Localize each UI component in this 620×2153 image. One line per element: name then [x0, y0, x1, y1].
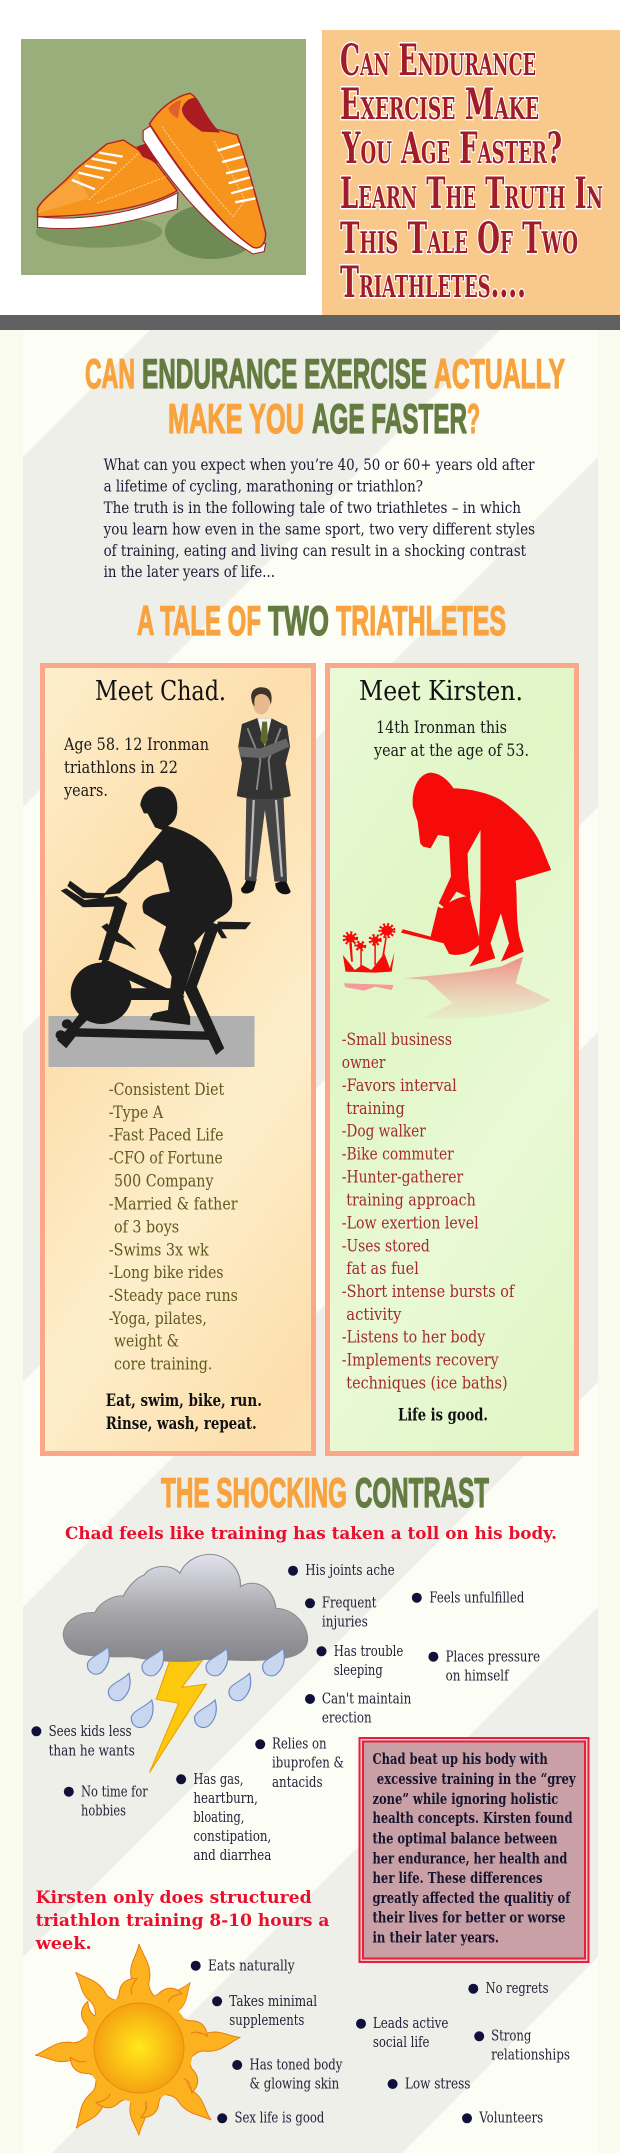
callout: summary box: her life. These differences — [372, 1870, 542, 1887]
Chad symptoms bullets: and diarrhea — [193, 1847, 272, 1864]
Kirsten motto: Life is good. — [398, 1406, 488, 1425]
Chad traits list: -CFO of Fortune — [109, 1149, 223, 1169]
Chad symptoms bullets: ibuprofen & — [272, 1755, 344, 1772]
Kirsten traits list: training — [346, 1099, 405, 1119]
Chad symptoms bullets: Frequent — [322, 1595, 377, 1612]
callout: summary box: her endurance, her health and — [372, 1851, 567, 1868]
heading: a tale of two triathletes: A TALE OF — [137, 597, 261, 644]
Chad traits list: -Married & father — [109, 1194, 238, 1214]
Kirsten traits list: owner — [342, 1053, 386, 1073]
Chad traits list: -Type A — [109, 1103, 164, 1123]
Chad traits list — [109, 1080, 238, 1375]
Chad symptoms bullets: His joints ache — [305, 1562, 395, 1579]
Kirsten benefits bullets: social life — [373, 2034, 429, 2051]
icon: businessman in suit — [237, 687, 291, 894]
Chad symptoms bullets: erection — [322, 1710, 372, 1727]
Kirsten benefits bullets: relationships — [491, 2047, 570, 2064]
Kirsten benefits bullets: Leads active — [373, 2015, 448, 2032]
panel: Chad — [42, 666, 314, 1454]
main heading: AGE FASTER — [312, 395, 467, 442]
title text — [340, 36, 603, 308]
heading: the shocking contrast: THE SHOCKING — [161, 1469, 347, 1516]
Chad symptoms bullets: Has trouble — [334, 1643, 403, 1660]
main heading: CAN — [85, 350, 135, 397]
Chad traits list: core training. — [114, 1355, 212, 1375]
Kirsten benefits bullets: Has toned body — [250, 2056, 343, 2073]
Chad symptoms bullets: Can't maintain — [322, 1691, 411, 1708]
Chad intro: Age 58. 12 Ironman — [63, 735, 209, 754]
Kirsten benefits bullets: Sex life is good — [234, 2110, 324, 2127]
Chad symptoms bullets: Feels unfulfilled — [429, 1589, 524, 1606]
Chad motto — [106, 1391, 262, 1433]
Chad symptoms bullets: Places pressure — [446, 1648, 540, 1665]
Chad traits list: -Long bike rides — [109, 1263, 224, 1283]
subheading: Kirsten — [35, 1888, 329, 1954]
striped inner panel — [23, 330, 598, 2153]
callout: summary box: health concepts. Kirsten found — [372, 1810, 572, 1827]
Chad symptoms bullets — [31, 1562, 540, 1864]
Kirsten intro — [373, 718, 529, 760]
Kirsten intro: 14th Ironman this — [376, 718, 507, 737]
icon: cyclist silhouette on bike — [56, 787, 251, 1055]
Kirsten traits list: -Bike commuter — [342, 1145, 455, 1165]
Kirsten benefits bullets: Low stress — [405, 2076, 470, 2093]
Kirsten traits list: activity — [346, 1305, 402, 1325]
Kirsten benefits bullets: Strong — [491, 2028, 531, 2045]
intro paragraph: What can you expect when you’re 40, 50 or 60+ years old after — [104, 455, 535, 474]
Chad motto: Rinse, wash, repeat. — [106, 1414, 257, 1433]
Kirsten benefits bullets: Takes minimal — [229, 1993, 317, 2010]
Chad traits list: of 3 boys — [114, 1217, 179, 1237]
Chad symptoms bullets: sleeping — [334, 1662, 383, 1679]
floor — [48, 1016, 254, 1067]
callout: summary box: in their later years. — [372, 1930, 499, 1947]
subheading: Kirsten: Kirsten only does structured — [36, 1888, 312, 1908]
Chad symptoms bullets: injuries — [322, 1614, 368, 1631]
main heading — [85, 350, 565, 442]
heading: a tale of two triathletes — [137, 597, 506, 644]
panel: Kirsten — [328, 666, 576, 1454]
callout: summary box: the optimal balance between — [372, 1831, 558, 1848]
Chad traits list: weight & — [114, 1332, 179, 1352]
Chad symptoms bullets: Has gas, — [193, 1771, 244, 1788]
Chad intro: years. — [63, 781, 108, 800]
Kirsten traits list: -Listens to her body — [342, 1328, 486, 1348]
intro paragraph — [103, 455, 535, 581]
Kirsten traits list: -Implements recovery — [342, 1351, 499, 1371]
intro paragraph: The truth is in the following tale of two triathletes – in which — [104, 498, 521, 517]
Chad symptoms bullets: than he wants — [49, 1742, 135, 1759]
Chad traits list: -Consistent Diet — [109, 1080, 224, 1100]
Kirsten benefits bullets: Eats naturally — [208, 1957, 295, 1974]
intro paragraph: of training, eating and living can result in a shocking contrast — [104, 541, 526, 560]
Chad traits list: 500 Company — [114, 1172, 214, 1192]
Kirsten traits list: -Hunter-gatherer — [342, 1168, 464, 1188]
Chad traits list: -Swims 3x wk — [109, 1240, 209, 1260]
subheading: Chad: Chad feels like training has taken a toll on his body. — [65, 1524, 557, 1544]
main heading: ? — [467, 395, 480, 442]
Kirsten traits list: training approach — [346, 1190, 476, 1210]
icon: storm cloud with rain and lightning — [63, 1554, 308, 1773]
Chad traits list: -Steady pace runs — [109, 1286, 238, 1306]
Chad symptoms bullets: No time for — [81, 1783, 148, 1800]
subheading: Kirsten: triathlon training 8-10 hours a — [36, 1911, 329, 1931]
Kirsten traits list: -Dog walker — [342, 1122, 426, 1142]
main heading: ENDURANCE EXERCISE — [142, 350, 427, 397]
Chad traits list: -Fast Paced Life — [109, 1126, 224, 1146]
callout: summary box — [360, 1738, 588, 1962]
Kirsten traits list: techniques (ice baths) — [346, 1374, 508, 1394]
Kirsten traits list: -Short intense bursts of — [342, 1282, 516, 1302]
Kirsten benefits bullets: supplements — [229, 2012, 304, 2029]
callout: summary box: excessive training in the “grey — [377, 1771, 576, 1788]
heading: a tale of two triathletes: TRIATHLETES — [336, 597, 506, 644]
Chad symptoms bullets: constipation, — [193, 1828, 271, 1845]
Kirsten traits list: fat as fuel — [346, 1259, 419, 1279]
Chad symptoms bullets: on himself — [446, 1667, 510, 1684]
Kirsten traits list: -Low exertion level — [342, 1213, 479, 1233]
header image: orange sneakers — [21, 39, 306, 275]
Chad symptoms bullets: heartburn, — [193, 1790, 258, 1807]
main heading: MAKE YOU — [168, 395, 304, 442]
Kirsten benefits bullets: No regrets — [486, 1980, 548, 1997]
title panel — [322, 30, 620, 315]
icon: woman watering flowers — [343, 773, 551, 1019]
callout: summary box: greatly affected the qualitiy of — [372, 1890, 572, 1907]
intro paragraph: a lifetime of cycling, marathoning or triathlon? — [104, 476, 423, 496]
callout: summary box: their lives for better or worse — [372, 1910, 566, 1927]
Chad motto: Eat, swim, bike, run. — [106, 1391, 262, 1410]
Kirsten traits list: -Favors interval — [342, 1076, 457, 1096]
Kirsten traits list: -Uses stored — [342, 1236, 430, 1256]
Kirsten traits list: -Small business — [342, 1030, 452, 1050]
Chad symptoms bullets: hobbies — [81, 1802, 126, 1819]
Chad symptoms bullets: bloating, — [193, 1809, 244, 1826]
Chad intro — [63, 735, 209, 800]
Chad symptoms bullets: Relies on — [272, 1736, 327, 1753]
icon: sun — [34, 1944, 242, 2139]
Kirsten heading: Meet Kirsten. — [359, 675, 523, 707]
heading: the shocking contrast: CONTRAST — [355, 1469, 489, 1516]
grey divider band — [0, 315, 620, 330]
heading: a tale of two triathletes: TWO — [268, 597, 329, 644]
Chad traits list: -Yoga, pilates, — [109, 1309, 207, 1329]
Chad symptoms bullets: Sees kids less — [49, 1723, 132, 1740]
intro paragraph: you learn how even in the same sport, two very different styles — [103, 520, 535, 538]
Chad intro: triathlons in 22 — [64, 758, 178, 777]
Chad symptoms bullets: antacids — [272, 1774, 323, 1791]
Kirsten benefits bullets — [191, 1957, 570, 2127]
Kirsten intro: year at the age of 53. — [373, 741, 529, 760]
callout: summary box: Chad beat up his body with — [372, 1751, 548, 1768]
Kirsten benefits bullets: & glowing skin — [250, 2076, 339, 2093]
Kirsten benefits bullets: Volunteers — [478, 2110, 543, 2127]
callout: summary box: zone” while ignoring holistic — [372, 1791, 558, 1808]
Kirsten traits list — [342, 1030, 516, 1394]
Chad heading: Meet Chad. — [95, 675, 226, 707]
subheading: Kirsten: week. — [35, 1934, 92, 1954]
intro paragraph: in the later years of life... — [104, 562, 275, 581]
